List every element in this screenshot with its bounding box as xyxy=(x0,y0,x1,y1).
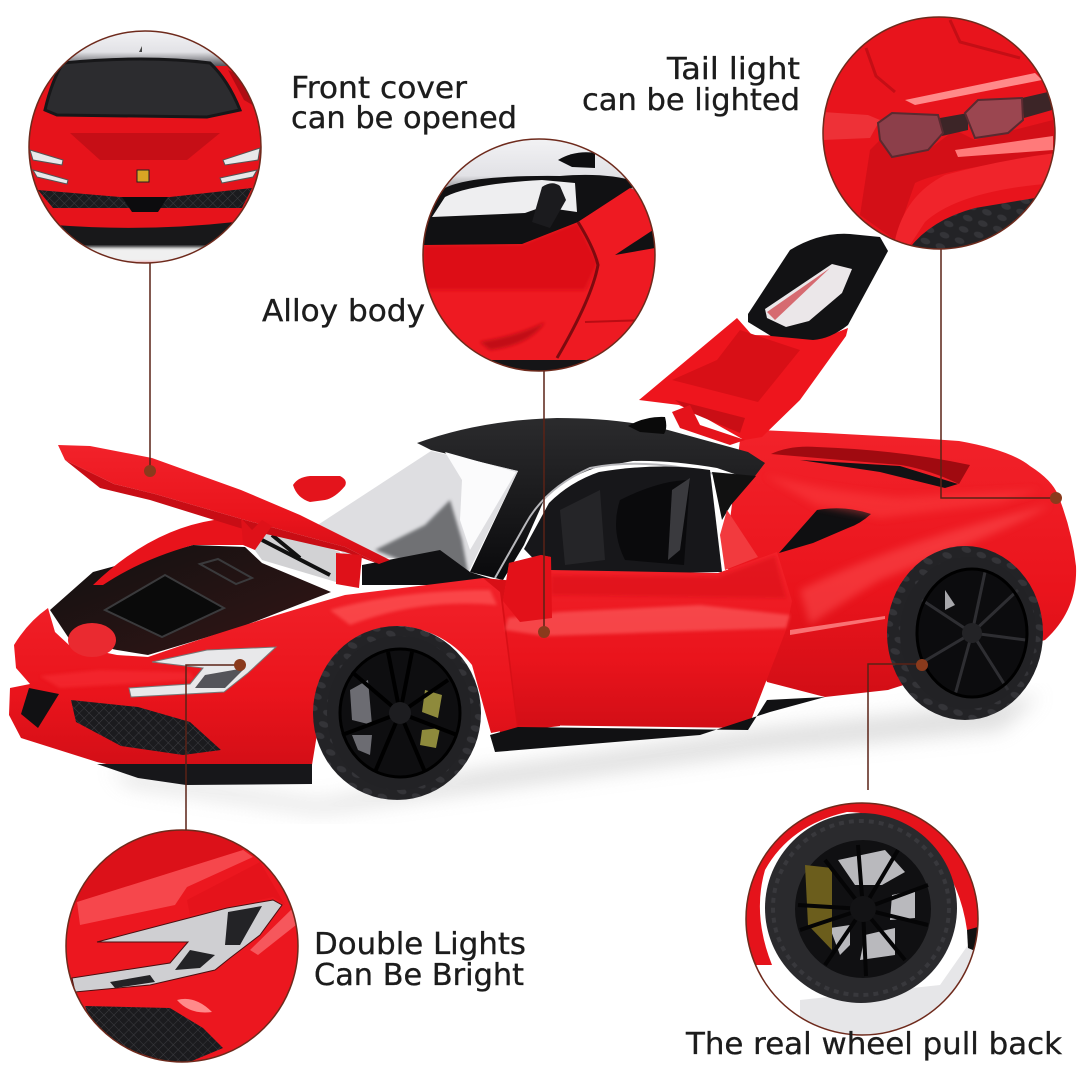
car xyxy=(9,234,1076,812)
panel: front view circle xyxy=(29,31,261,263)
front left red bump xyxy=(68,623,116,657)
body side crease xyxy=(790,616,885,635)
hood mirror xyxy=(293,476,346,502)
front grille xyxy=(71,700,221,755)
leader lines and dots xyxy=(144,248,1062,830)
roof fin xyxy=(558,152,595,168)
front circle border xyxy=(29,31,261,263)
open hood xyxy=(58,445,390,564)
arch band xyxy=(895,153,1056,245)
door black window frame xyxy=(748,234,888,340)
headlight xyxy=(72,900,282,992)
panel: door detail circle xyxy=(423,139,658,372)
front wheel xyxy=(313,626,481,800)
crease highlight xyxy=(77,850,253,925)
headlight xyxy=(129,647,276,697)
interior opening xyxy=(524,466,722,575)
windshield reflection xyxy=(445,452,516,550)
spokes xyxy=(798,845,928,976)
roof fin xyxy=(628,417,666,434)
arch shadow xyxy=(967,925,985,955)
label: alloy body: Alloy body xyxy=(262,294,425,329)
upper panel darker xyxy=(66,830,243,905)
label: double lights: Can Be Bright xyxy=(314,958,524,993)
label: double lights: Double Lights xyxy=(314,927,526,962)
label: real wheel pull back: The real wheel pull back xyxy=(685,1027,1063,1062)
right upper panel xyxy=(578,188,640,222)
wiper zone glass xyxy=(246,528,340,582)
rear deck vent xyxy=(771,447,970,484)
windshield cabin shadow xyxy=(375,500,468,573)
rear side intake xyxy=(779,508,871,553)
door shine xyxy=(505,605,790,636)
black band xyxy=(423,175,640,245)
upper darker band xyxy=(423,222,598,290)
door frame pillar xyxy=(720,510,758,570)
bottom black xyxy=(492,360,586,370)
windshield xyxy=(310,451,518,573)
red arch xyxy=(746,803,978,965)
rear body xyxy=(725,430,1076,697)
panel: headlight circle xyxy=(66,830,298,1066)
pink band xyxy=(955,136,1053,157)
body shine xyxy=(177,999,212,1012)
body lower crease xyxy=(585,320,650,322)
door glass xyxy=(765,264,852,327)
door top shade xyxy=(551,556,786,598)
creases xyxy=(866,20,1020,92)
cowl xyxy=(362,550,495,585)
ground shadow xyxy=(110,695,1040,812)
front fender shine xyxy=(330,590,497,625)
chrome window line xyxy=(495,464,730,578)
upper highlight xyxy=(905,73,1042,105)
label: tail light: can be lighted xyxy=(582,83,800,118)
grille xyxy=(38,188,252,208)
edge of roof right xyxy=(228,70,252,105)
bay vent xyxy=(200,559,252,584)
wheel circle border xyxy=(746,803,978,1035)
bay tray xyxy=(105,575,224,637)
label: front cover: can be opened xyxy=(291,101,517,136)
door seam xyxy=(557,222,598,358)
panel: wheel circle xyxy=(746,803,985,1035)
butterfly door xyxy=(639,234,888,445)
hood underside xyxy=(65,460,379,564)
grille xyxy=(85,1006,223,1066)
red bar over bay xyxy=(93,520,246,585)
brake and caliper glimpses xyxy=(350,680,372,755)
caliper xyxy=(805,865,832,950)
door mirror and door xyxy=(503,552,792,728)
logo badge xyxy=(137,170,149,182)
panel: tail light circle xyxy=(823,17,1056,250)
headlight dark details xyxy=(110,906,262,988)
roof xyxy=(417,418,765,580)
headlight circle border xyxy=(66,830,298,1062)
seat xyxy=(532,183,566,228)
brow xyxy=(187,862,285,915)
front splitter xyxy=(97,764,312,785)
rim interior xyxy=(795,840,931,978)
floor xyxy=(800,945,985,1035)
lower shade xyxy=(480,322,545,350)
rear wheel xyxy=(887,546,1043,720)
red inner door xyxy=(639,318,848,440)
window xyxy=(432,180,577,217)
rear upper shine xyxy=(765,475,1040,518)
tail lights xyxy=(878,113,943,157)
sky gradient xyxy=(445,140,634,190)
seats xyxy=(616,480,690,565)
lower black xyxy=(60,222,232,250)
left lip xyxy=(823,112,880,140)
door seam backing xyxy=(483,578,560,733)
disc patches xyxy=(830,850,915,960)
windscreen xyxy=(45,59,240,117)
tire xyxy=(765,813,957,1003)
bridge and right trim xyxy=(940,92,1052,136)
engine bay xyxy=(50,545,331,655)
hood strut xyxy=(336,553,362,588)
antenna xyxy=(139,46,142,52)
rear body shine xyxy=(800,505,1050,625)
tire xyxy=(912,198,1034,248)
left headlights xyxy=(30,150,68,184)
front body xyxy=(9,578,517,770)
door strut xyxy=(672,405,745,445)
rear window triangle xyxy=(712,472,756,520)
label: front cover: Front cover xyxy=(291,71,468,106)
sill xyxy=(490,697,825,752)
front vent xyxy=(21,688,59,728)
body below lights xyxy=(860,120,1056,240)
door circle border xyxy=(423,139,655,371)
tail circle border xyxy=(823,17,1055,249)
right headlights xyxy=(220,148,260,183)
right highlight xyxy=(250,905,296,955)
hood centre xyxy=(70,133,220,160)
backdrop xyxy=(68,32,227,66)
black slit xyxy=(615,230,655,255)
label: tail light: Tail light xyxy=(666,52,800,87)
door hinge panel xyxy=(503,555,552,622)
